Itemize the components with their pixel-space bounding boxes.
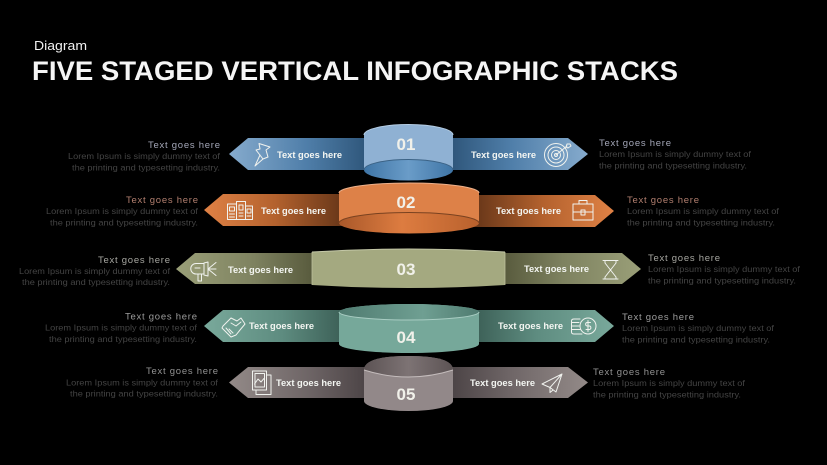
icon: megaphone: [191, 262, 216, 281]
left text block 1: the printing and typesetting industry.: [72, 162, 220, 172]
left arrow 3: [176, 253, 318, 284]
cylinder 2: [339, 183, 479, 234]
cylinder 3: [312, 249, 505, 288]
left text block 2: [46, 195, 199, 228]
right arrow 4: [473, 310, 614, 342]
right text block 1: Lorem Ipsum is simply dummy text of: [599, 149, 752, 159]
right text block 5: [593, 367, 746, 400]
cylinder 1: [364, 125, 453, 180]
icon: hourglass: [603, 260, 618, 279]
icon: briefcase: [573, 200, 593, 220]
inner label left 4: Text goes here: [249, 321, 314, 332]
left text block 2: Lorem Ipsum is simply dummy text of: [46, 206, 199, 216]
icon: push pin: [255, 144, 270, 166]
right arrow 2: [473, 195, 614, 227]
left text block 1: Lorem Ipsum is simply dummy text of: [68, 151, 221, 161]
stage 4: [45, 304, 775, 353]
left arrow 2: [204, 194, 345, 226]
right text block 4: Lorem Ipsum is simply dummy text of: [622, 323, 775, 333]
right text block 5: Text goes here: [593, 367, 665, 378]
eyebrow: Diagram: Diagram: [34, 38, 87, 53]
right text block 4: the printing and typesetting industry.: [622, 334, 770, 344]
left text block 3: Lorem Ipsum is simply dummy text of: [19, 266, 171, 276]
right text block 4: Text goes here: [622, 312, 694, 323]
right text block 2: [627, 195, 780, 228]
right text block 2: Text goes here: [627, 195, 699, 206]
icon: picture stack: [252, 371, 271, 394]
right text block 2: Lorem Ipsum is simply dummy text of: [627, 206, 780, 216]
right text block 4: [622, 312, 775, 344]
left text block 4: Text goes here: [125, 312, 197, 322]
right text block 3: [648, 253, 801, 286]
cylinder 5: [364, 356, 453, 411]
right text block 5: the printing and typesetting industry.: [593, 390, 741, 400]
stage 5: [66, 356, 746, 411]
stage 3: [19, 249, 801, 288]
inner label left 3: Text goes here: [228, 265, 293, 276]
inner label left 2: Text goes here: [261, 206, 326, 217]
right text block 1: Text goes here: [599, 138, 671, 149]
left text block 5: Text goes here: [146, 366, 218, 377]
left text block 3: the printing and typesetting industry.: [22, 277, 170, 287]
left text block 4: Lorem Ipsum is simply dummy text of: [45, 322, 198, 332]
right text block 3: Text goes here: [648, 253, 720, 264]
right arrow 5: [448, 367, 588, 398]
left text block 4: [45, 312, 198, 344]
right text block 2: the printing and typesetting industry.: [627, 218, 775, 228]
right text block 3: the printing and typesetting industry.: [648, 276, 796, 286]
left text block 2: Text goes here: [126, 195, 198, 206]
left text block 5: the printing and typesetting industry.: [70, 388, 218, 398]
cylinder 4: [339, 304, 479, 353]
inner label right 5: Text goes here: [470, 378, 535, 389]
number 05: 05: [397, 385, 415, 404]
left arrow 1: [229, 138, 370, 170]
inner label right 3: Text goes here: [524, 264, 589, 275]
icon: coins: [572, 318, 596, 334]
inner label left 1: Text goes here: [277, 150, 342, 161]
inner label right 4: Text goes here: [498, 321, 563, 332]
icon: target: [544, 144, 571, 166]
inner label left 5: Text goes here: [276, 378, 341, 389]
left arrow 5: [229, 367, 370, 398]
icon: handshake: [222, 318, 245, 337]
left text block 5: Lorem Ipsum is simply dummy text of: [66, 378, 219, 388]
number 01: 01: [397, 135, 415, 154]
number 02: 02: [397, 193, 415, 212]
right arrow 1: [448, 138, 588, 170]
stage 1: [68, 125, 752, 180]
right arrow 3: [499, 253, 641, 284]
left text block 3: Text goes here: [98, 255, 170, 266]
stage 2: [46, 183, 780, 234]
left text block 5: [66, 366, 219, 398]
left text block 4: the printing and typesetting industry.: [49, 334, 197, 344]
inner label right 2: Text goes here: [496, 206, 561, 217]
inner label right 1: Text goes here: [471, 150, 536, 161]
icon: office buildings: [228, 202, 252, 220]
right text block 1: [599, 138, 752, 170]
left text block 3: [19, 255, 171, 287]
icon: paper plane: [542, 374, 562, 392]
right text block 1: the printing and typesetting industry.: [599, 160, 747, 170]
right text block 5: Lorem Ipsum is simply dummy text of: [593, 378, 746, 388]
number 04: 04: [397, 328, 416, 347]
left text block 1: Text goes here: [148, 140, 220, 151]
title: FIVE STAGED VERTICAL INFOGRAPHIC STACKS: [32, 56, 678, 86]
left text block 1: [68, 140, 221, 172]
right text block 3: Lorem Ipsum is simply dummy text of: [648, 264, 801, 274]
left arrow 4: [204, 310, 345, 342]
number 03: 03: [397, 260, 415, 279]
left text block 2: the printing and typesetting industry.: [50, 218, 198, 228]
